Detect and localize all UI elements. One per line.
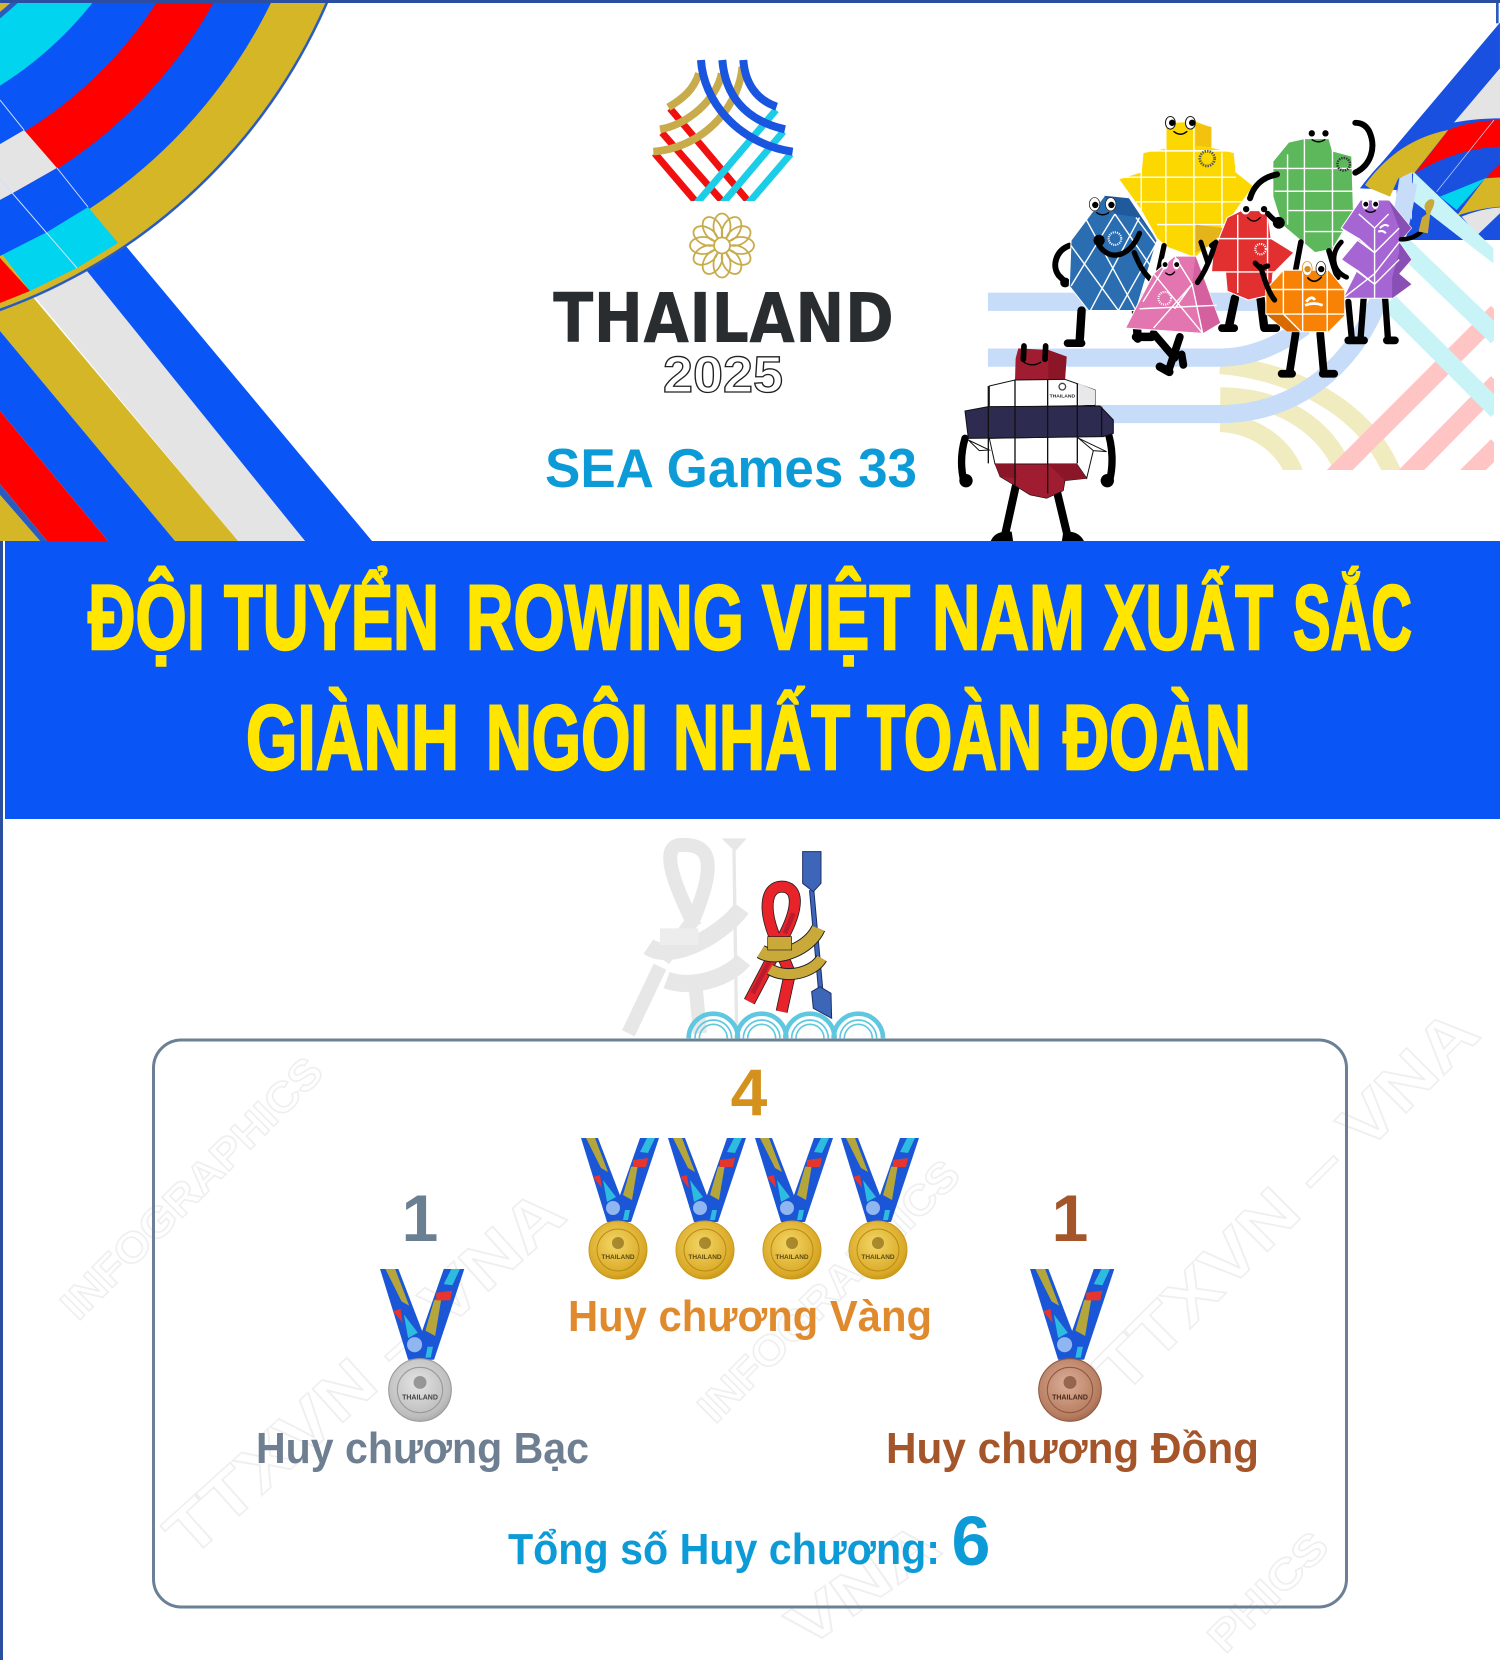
gold medal 1: THAILAND [601, 1254, 635, 1261]
gold medal 3 [755, 1138, 833, 1279]
watermarks: INFOGRAPHICS [688, 1151, 969, 1431]
gold medal 1 [581, 1138, 659, 1279]
decoration: top-left Thai woven bands [0, 0, 375, 541]
mascot: purple [1334, 198, 1434, 340]
watermarks: TTXVN – VNA [1080, 994, 1493, 1407]
title line 1: SẮC [1293, 566, 1412, 669]
title line 1: NAM [932, 567, 1085, 669]
panel: medal table [154, 1040, 1346, 1607]
title line 1: ĐỘI [88, 566, 205, 669]
mascot: blue [1055, 196, 1157, 343]
weave cells [0, 100, 118, 303]
title line 1: ROWING [466, 567, 744, 669]
subtitle: SEA Games 33: SEA Games 33 [545, 437, 917, 499]
diagonal stripes [0, 245, 372, 541]
gold medal 2 [668, 1138, 746, 1279]
title line 1: TUYỂN [224, 565, 439, 669]
title line 1 [88, 565, 1412, 669]
icon: rowing pictogram [628, 838, 883, 1063]
blue oar [803, 852, 832, 1018]
watermarks: INFOGRAPHICS [51, 1048, 332, 1328]
title line 2: NHẤT [673, 686, 850, 789]
mascot: green [1250, 123, 1372, 253]
title line 2: GIÀNH [246, 687, 459, 789]
bronze label: Huy chương Đồng [886, 1424, 1259, 1473]
gold label: Huy chương Vàng [568, 1292, 932, 1341]
mascot: Thai flag [959, 346, 1114, 543]
mascot: Thai flag: THAILAND [1050, 394, 1075, 400]
bronze count: 1 [1052, 1181, 1088, 1255]
gold count: 4 [731, 1055, 768, 1129]
gold medal 4 [841, 1138, 919, 1279]
concentric arcs [0, 3, 328, 312]
silver count: 1 [402, 1181, 438, 1255]
mascot: red [1211, 201, 1294, 328]
watermarks: PHICS [1198, 1522, 1337, 1660]
pale line work [988, 182, 1497, 477]
mascot: pink [1125, 242, 1220, 372]
title line 1: VIỆT [762, 566, 910, 669]
gold medal 3: THAILAND [775, 1254, 809, 1261]
logo year: 2025: 2025 [663, 346, 783, 403]
logo: gold rosette [690, 214, 754, 278]
logo: Thailand 2025 emblem [653, 60, 793, 203]
title line 1: XUẤT [1104, 566, 1273, 669]
title line 2 [246, 686, 1251, 789]
watermarks: TTXVN – VNA [150, 1174, 578, 1570]
logo wordmark: THAILAND: THAILAND [553, 279, 894, 359]
watermarks [51, 994, 1493, 1660]
waves [686, 1011, 886, 1038]
bronze medal: THAILAND [1052, 1395, 1088, 1402]
gold medal 2: THAILAND [688, 1254, 722, 1261]
mascot: orange [1255, 242, 1345, 374]
watermarks: VNA [774, 1508, 952, 1660]
gold medal 4: THAILAND [861, 1254, 895, 1261]
silver label: Huy chương Bạc [256, 1424, 589, 1473]
mascot: yellow [1118, 116, 1254, 258]
bronze medal [1030, 1269, 1114, 1421]
title line 2: ĐOÀN [1063, 687, 1251, 789]
total label: Tổng số Huy chương: [508, 1525, 940, 1574]
decoration: top-right coloured corner [1360, 0, 1500, 263]
ghost pictogram [628, 838, 747, 1033]
title banner [5, 541, 1500, 819]
title line 2: NGÔI [486, 686, 648, 789]
total number: 6 [952, 1502, 990, 1580]
silver medal [380, 1269, 464, 1421]
title line 2: TOÀN [867, 687, 1042, 789]
gold bands [761, 928, 822, 974]
silver medal: THAILAND [402, 1395, 438, 1402]
red ribbon knot [749, 887, 795, 1012]
